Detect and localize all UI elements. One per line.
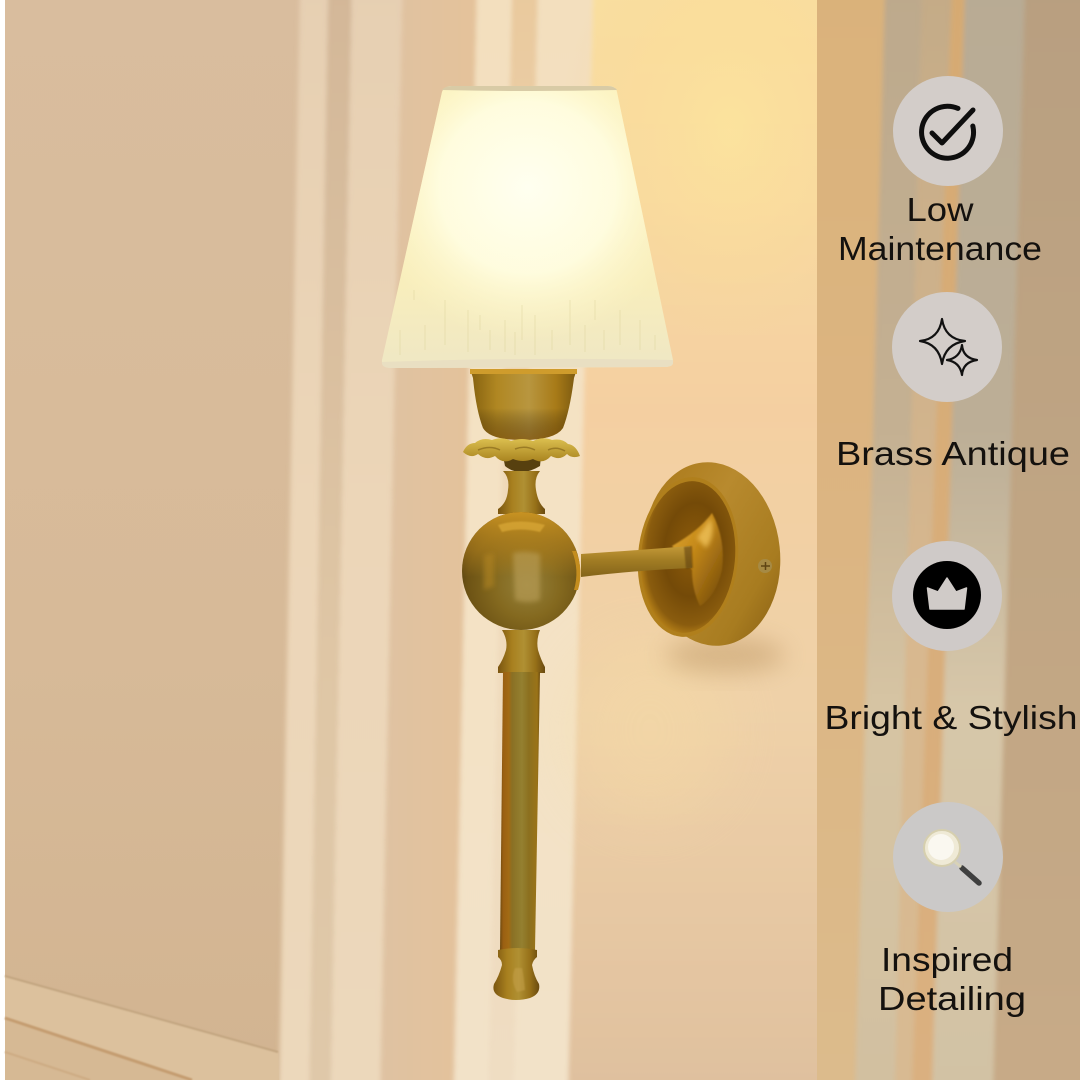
neck under collar	[503, 456, 541, 472]
label: low maintenance: Maintenance	[838, 230, 1042, 267]
icon: magnifying glass	[893, 802, 1003, 912]
label: low maintenance: Low	[906, 191, 974, 228]
lamp shade	[382, 86, 673, 368]
side panel backdrop	[800, 0, 1080, 1080]
feature: bright and stylish	[824, 541, 1078, 736]
brass cup	[470, 369, 577, 440]
stem	[500, 672, 540, 950]
label: inspired detailing: Inspired	[881, 941, 1013, 978]
icon: check badge	[893, 76, 1003, 186]
brass ball	[462, 512, 580, 630]
label: bright and stylish: Bright & Stylish	[824, 699, 1078, 736]
wall lamp	[382, 86, 789, 1000]
floral collar	[463, 438, 580, 461]
screw	[758, 559, 772, 573]
feature: brass antique	[836, 292, 1070, 472]
linen texture	[400, 290, 655, 355]
stem base	[493, 948, 539, 1000]
wall mount	[631, 455, 789, 653]
label: low maintenance	[838, 191, 1042, 267]
neck	[498, 471, 545, 514]
lower collar	[498, 630, 545, 673]
wall arm	[581, 546, 693, 577]
label: brass antique: Brass Antique	[836, 435, 1070, 472]
icon: crown badge	[892, 541, 1002, 651]
label: inspired detailing: Detailing	[878, 980, 1026, 1017]
label: inspired detailing	[878, 941, 1026, 1017]
feature: inspired detailing	[878, 802, 1026, 1017]
icon: sparkles	[892, 292, 1002, 402]
feature: low maintenance	[838, 76, 1042, 267]
